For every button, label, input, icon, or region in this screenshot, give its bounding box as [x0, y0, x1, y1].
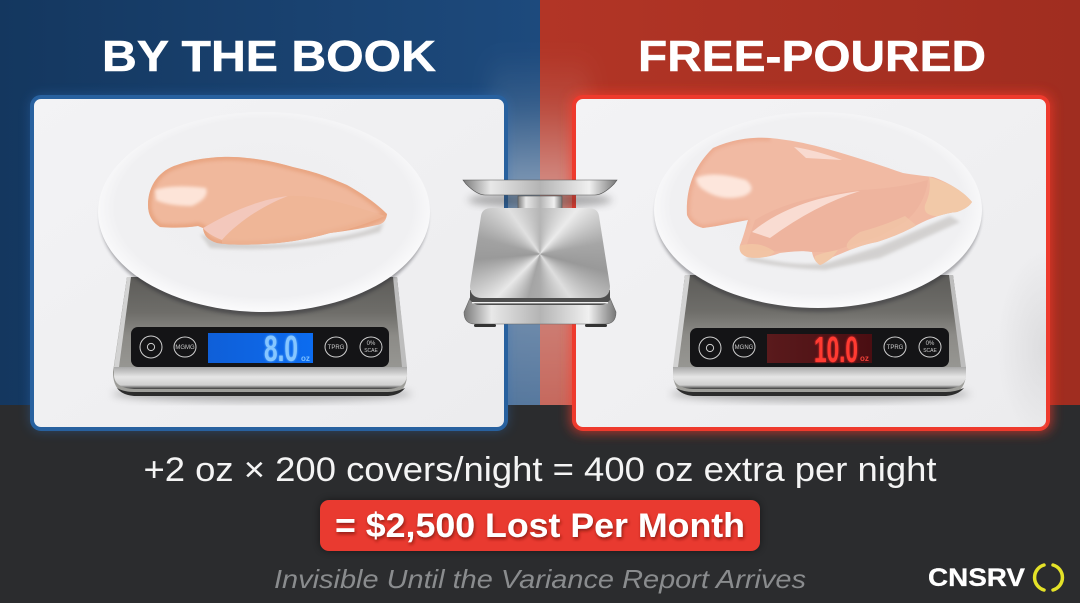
heading: by the book: BY THE BOOK: [102, 32, 436, 81]
scale buttons: TPRG: [328, 345, 345, 351]
display: 10.0 oz: oz: [860, 354, 869, 363]
display: 10.0 oz: 10.0: [814, 329, 858, 370]
scale pan: [463, 180, 617, 195]
icon: yellow ring: [1035, 565, 1062, 590]
panel: free-poured photo: [571, 94, 1051, 432]
scale buttons: SCAE: [923, 348, 937, 354]
scale buttons: 0%: [926, 341, 935, 347]
chicken breast: small: [148, 156, 387, 250]
scale buttons: [699, 337, 941, 359]
background: blue, red and dark zones: [0, 0, 1080, 405]
icon: steel scale between panels: [463, 180, 617, 327]
scale buttons: [140, 336, 382, 358]
chicken breast: large: [680, 130, 980, 270]
kitchen scale: left: [112, 277, 412, 402]
panel: by the book photo: [31, 96, 507, 430]
scale buttons: MGMG: [175, 345, 195, 351]
scale buttons: TPRG: [887, 345, 904, 351]
scale pedestal: [518, 196, 562, 209]
scale buttons: MGNG: [735, 345, 754, 351]
display: 8.0 oz: oz: [301, 354, 310, 363]
display: 10.0 oz: [767, 329, 872, 370]
logo: CNSRV: CNSRV: [928, 564, 1025, 592]
logo: CNSRV: [928, 564, 1062, 592]
formula text: +2 oz × 200 covers/night = 400 oz extra per night: [144, 451, 937, 489]
heading: free-poured: FREE-POURED: [638, 32, 986, 81]
callout: monthly loss pill: [320, 500, 760, 551]
kitchen scale: right: [670, 275, 970, 402]
plate: left: [98, 112, 430, 316]
tagline: Invisible Until the Variance Report Arrives: [274, 564, 806, 594]
scale buttons: 0%: [367, 341, 376, 347]
scale buttons: SCAE: [364, 348, 378, 354]
display: 8.0 oz: 8.0: [264, 328, 298, 369]
scale base: [464, 298, 616, 324]
scale brushed top: [470, 208, 610, 300]
plate: right: [654, 112, 982, 312]
callout: monthly loss pill: = $2,500 Lost Per Month: [335, 507, 745, 545]
display: 8.0 oz: [208, 328, 313, 369]
